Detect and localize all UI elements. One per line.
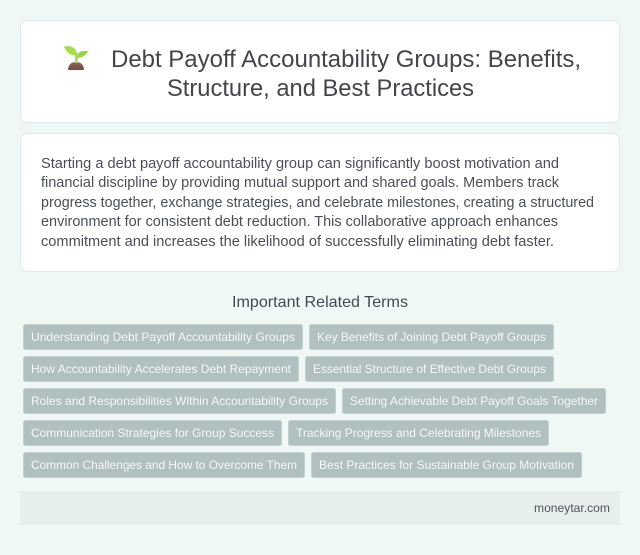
tag: setting goals: Setting Achievable Debt Payoff Goals Together: [350, 394, 598, 408]
title: Debt Payoff Accountability Groups: Benefits,: [111, 46, 581, 73]
text block: introduction: progress together, exchange strategies, and celebrate milestones, creating a structured: [41, 195, 594, 211]
title: [111, 46, 581, 102]
tag: communication strategies: Communication Strategies for Group Success: [31, 426, 274, 440]
text block: introduction: Starting a debt payoff accountability group can significantly boost motivation and: [41, 156, 559, 172]
tag: roles and responsibilities: Roles and Responsibilities Within Accountability Groups: [31, 394, 328, 408]
footer: [20, 491, 620, 525]
tag: key benefits: Key Benefits of Joining Debt Payoff Groups: [317, 330, 546, 344]
footer source label: moneytar.com: [534, 501, 610, 515]
panel: title header: [20, 20, 620, 122]
tag: tracking progress: Tracking Progress and Celebrating Milestones: [296, 426, 541, 440]
tag: accelerates repayment: How Accountability Accelerates Debt Repayment: [31, 362, 292, 376]
text block: introduction: [41, 156, 594, 250]
text block: introduction: environment for consistent debt reduction. This collaborative approach enhances: [41, 214, 558, 230]
tag: essential structure: Essential Structure of Effective Debt Groups: [313, 362, 546, 376]
tag: roles and responsibilities: [24, 388, 336, 414]
title: Structure, and Best Practices: [167, 75, 474, 102]
tag: understanding groups: [24, 324, 302, 350]
tag: best practices: Best Practices for Sustainable Group Motivation: [319, 458, 574, 472]
tag: communication strategies: [24, 420, 282, 446]
tag: setting goals: [342, 388, 606, 414]
tag: key benefits: [310, 324, 554, 350]
tag list: [24, 324, 606, 478]
tag: accelerates repayment: [24, 356, 298, 382]
text block: introduction: financial discipline by providing mutual support and shared goals. Members track: [41, 175, 560, 191]
tag: common challenges: Common Challenges and How to Overcome Them: [31, 458, 297, 472]
tag: tracking progress: [288, 420, 548, 446]
text block: introduction: commitment and increases the likelihood of successfully eliminating debt faster.: [41, 234, 554, 250]
heading: important related terms: Important Related Terms: [232, 294, 408, 311]
tag: common challenges: [24, 452, 304, 478]
panel: intro paragraph: [20, 134, 620, 272]
tag: best practices: [312, 452, 582, 478]
tag: understanding groups: Understanding Debt Payoff Accountability Groups: [31, 330, 295, 344]
tag: essential structure: [306, 356, 554, 382]
icon: seedling: [64, 46, 88, 70]
